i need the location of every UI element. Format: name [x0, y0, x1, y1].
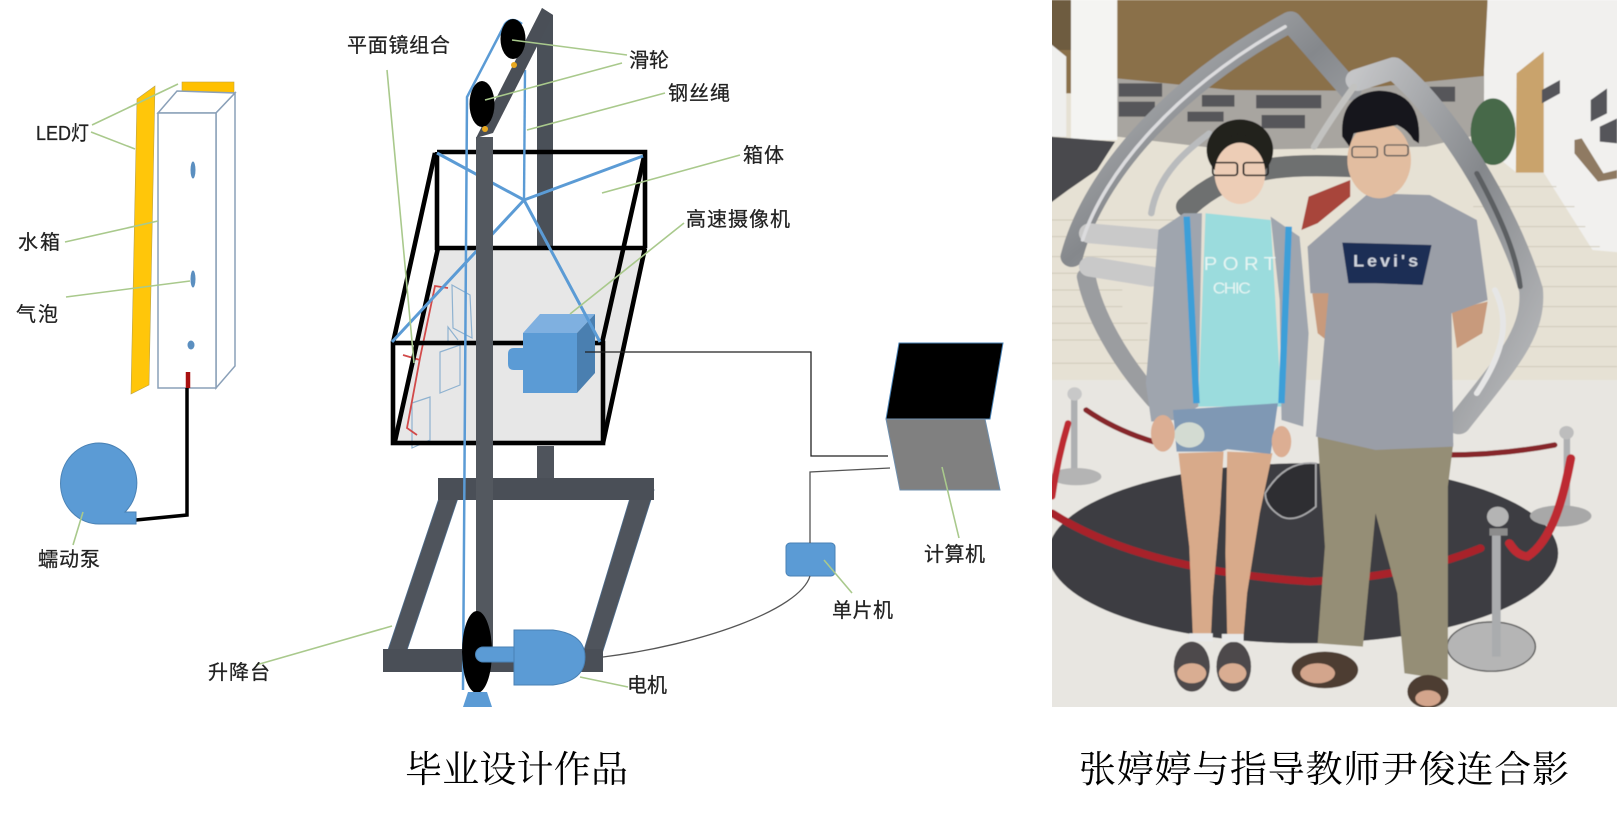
- label: wire rope: 钢丝绳: [668, 82, 730, 105]
- label: camera: 高速摄像机: [686, 208, 790, 231]
- front post: [1447, 507, 1535, 671]
- label: microcontroller: 单片机: [832, 599, 893, 622]
- girl legs: [1178, 452, 1272, 637]
- leader lines: [256, 40, 959, 687]
- leader lines: [65, 84, 190, 545]
- photo: student and teacher in front of sculpture: [1048, 0, 1617, 747]
- girl: PORT: [1204, 254, 1276, 275]
- sculpture foot: [1265, 463, 1316, 519]
- icon: peristaltic pump: [61, 443, 137, 524]
- man: Levi's: [1353, 251, 1418, 270]
- panel: lifting platform diagram: [208, 8, 1003, 707]
- base frame: [383, 478, 654, 672]
- label: mirrors: 平面镜组合: [347, 34, 450, 57]
- girl sandals: [1174, 633, 1251, 692]
- girl: [1146, 119, 1449, 708]
- man: [1308, 91, 1488, 680]
- label: LED light: LED灯: [36, 122, 89, 145]
- panel: bubble tank diagram: [16, 82, 235, 571]
- label: pulley: 滑轮: [629, 49, 669, 72]
- label: bubble: 气泡: [16, 303, 58, 326]
- label: motor: 电机: [627, 674, 667, 697]
- icon: microcontroller: [786, 543, 835, 576]
- icon: motor: [476, 630, 585, 685]
- water tank: [158, 91, 235, 388]
- label: lifting platform: 升降台: [208, 661, 270, 684]
- air tube: [136, 372, 188, 520]
- girl shorts: [1173, 403, 1278, 454]
- caption: graduation project: 毕业设计作品: [405, 749, 628, 791]
- shorts patch: [1174, 422, 1204, 448]
- rear post: [537, 8, 554, 482]
- label: pump: 蠕动泵: [38, 548, 100, 571]
- box frame: [393, 152, 646, 443]
- label: water tank: 水箱: [18, 231, 60, 254]
- icon: pulleys: [462, 19, 526, 707]
- icon: computer: [886, 343, 1003, 490]
- icon: side LED light: [131, 86, 155, 394]
- icon: high-speed camera: [508, 314, 595, 393]
- red ropes: [1052, 410, 1571, 582]
- icon: bubbles: [188, 162, 196, 350]
- mirror group: [403, 285, 472, 448]
- black marble platform: [1048, 463, 1558, 643]
- girl hands: [1151, 415, 1291, 457]
- front post and arm: [476, 8, 553, 662]
- wire rope: [463, 20, 522, 690]
- caption: student with supervising teacher: 张婷婷与指导教师尹俊连合影: [1079, 749, 1569, 791]
- rear posts: [1051, 387, 1591, 527]
- floor elements: [1048, 387, 1591, 671]
- photo background: [1050, 0, 1617, 747]
- box back face: [395, 248, 645, 443]
- man sandals: [1292, 652, 1449, 708]
- label: box: 箱体: [743, 144, 784, 167]
- label: computer: 计算机: [924, 543, 985, 566]
- suspension ropes: [392, 70, 643, 342]
- girl: CHIC: [1213, 279, 1251, 297]
- icon: top LED light: [182, 82, 234, 94]
- signal wires: [585, 352, 890, 657]
- mirror sculpture: [1072, 22, 1531, 423]
